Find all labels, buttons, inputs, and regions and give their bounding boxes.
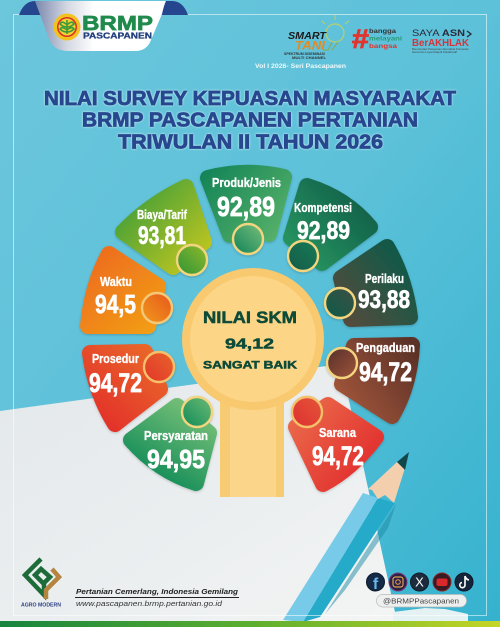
segment: prosedur: [89, 352, 174, 424]
crumpled paper corner: [393, 608, 468, 622]
icon: agro modern logo: [21, 559, 61, 608]
logo wordmark: BRMP: [82, 12, 153, 35]
bangga melayani bangsa logo: bangsa: [369, 43, 397, 50]
segment: pengaduan: 94,72: [359, 357, 412, 387]
footer divider: [75, 597, 239, 598]
central gauge stem: [220, 395, 284, 497]
segment: kompetensi: [288, 186, 370, 271]
pencil: [283, 452, 409, 622]
footer tagline: Pertanian Cemerlang, Indonesia Gemilang: [76, 587, 238, 596]
icon: BRMP emblem: [54, 14, 80, 40]
segment: biaya/tarif: [123, 187, 207, 275]
segment: pengaduan: Pengaduan: [356, 341, 415, 355]
bangga melayani bangsa logo: bangga: [369, 28, 396, 35]
logo subtitle: PASCAPANEN: [83, 30, 152, 40]
smart tani logo: MULTI CHANNEL: [292, 56, 327, 60]
title: [44, 88, 456, 154]
smart tani logo: TANI: [295, 40, 326, 52]
segment: persyaratan: [131, 397, 212, 483]
social handle pill: [376, 594, 466, 607]
segment: produk/jenis: Produk/Jenis: [212, 176, 281, 190]
gauge heading: NILAI SKM: [203, 309, 297, 327]
icon: tiktok: [455, 573, 473, 591]
segment: waktu: 94,5: [95, 289, 136, 319]
title: TRIWULAN II TAHUN 2026: [118, 132, 383, 154]
segment: sarana: Sarana: [319, 426, 357, 440]
central gauge circle: [182, 268, 324, 410]
segment: sarana: [292, 397, 376, 484]
segment: pengaduan: [327, 341, 415, 416]
footer website: www.pascapanen.brmp.pertanian.go.id: [76, 599, 223, 608]
gauge score: 94,12: [225, 336, 274, 352]
segment: perilaku: Perilaku: [365, 272, 404, 286]
smart tani logo: SMART: [288, 30, 328, 42]
segment: prosedur: 94,72: [89, 368, 142, 398]
bangga melayani bangsa logo: melayani: [369, 36, 402, 42]
segment: kompetensi: Kompetensi: [294, 201, 352, 215]
segment: prosedur: Prosedur: [92, 352, 139, 366]
segment: persyaratan: Persyaratan: [144, 429, 208, 443]
bottom green bar: [0, 621, 500, 627]
gauge rating: SANGAT BAIK: [203, 360, 297, 372]
segment: waktu: [88, 254, 172, 326]
segment: kompetensi: 92,89: [297, 217, 350, 245]
title: BRMP PASCAPANEN PERTANIAN: [82, 110, 418, 132]
icon: agro modern logo: AGRO MODERN: [21, 602, 61, 608]
bangga melayani bangsa logo: [352, 24, 402, 54]
segment: biaya/tarif: 93,81: [138, 222, 186, 250]
icon: youtube: [433, 573, 451, 591]
saya asn berakhlak logo: [412, 28, 471, 54]
icon: instagram: [389, 573, 407, 591]
volume caption: Vol I 2026- Seri Pascapanen: [255, 64, 346, 70]
title: NILAI SURVEY KEPUASAN MASYARAKAT: [44, 88, 456, 110]
saya asn berakhlak logo: Berorientasi Pelayanan Akuntabel Kompeten: [412, 47, 470, 51]
social icons: [366, 573, 473, 593]
header logo ribbon: [19, 1, 188, 51]
segment: persyaratan: 94,95: [147, 444, 205, 474]
bangga melayani bangsa logo: #: [352, 24, 369, 54]
icon: facebook: f: [373, 576, 379, 593]
social handle pill: @BRMPPascapanen: [383, 597, 459, 606]
icon: x: X: [415, 574, 424, 590]
smart tani logo: SPEKTRUM DISEMINASI: [284, 52, 325, 56]
segment: produk/jenis: 92,89: [217, 191, 275, 222]
saya asn berakhlak logo: BerAKHLAK: [412, 38, 470, 49]
segment: perilaku: [325, 247, 410, 319]
segment: biaya/tarif: Biaya/Tarif: [137, 208, 188, 222]
smart tani logo: [284, 15, 349, 60]
paper sheet: [0, 364, 402, 627]
saya asn berakhlak logo: SAYA ASN: [412, 28, 465, 38]
segment: produk/jenis: [208, 173, 284, 254]
segment: perilaku: 93,88: [358, 286, 410, 314]
saya asn berakhlak logo: Harmonis Loyal Adaptif Kolaboratif: [412, 50, 457, 54]
segment: waktu: Waktu: [100, 275, 132, 289]
segment: sarana: 94,72: [312, 441, 364, 471]
